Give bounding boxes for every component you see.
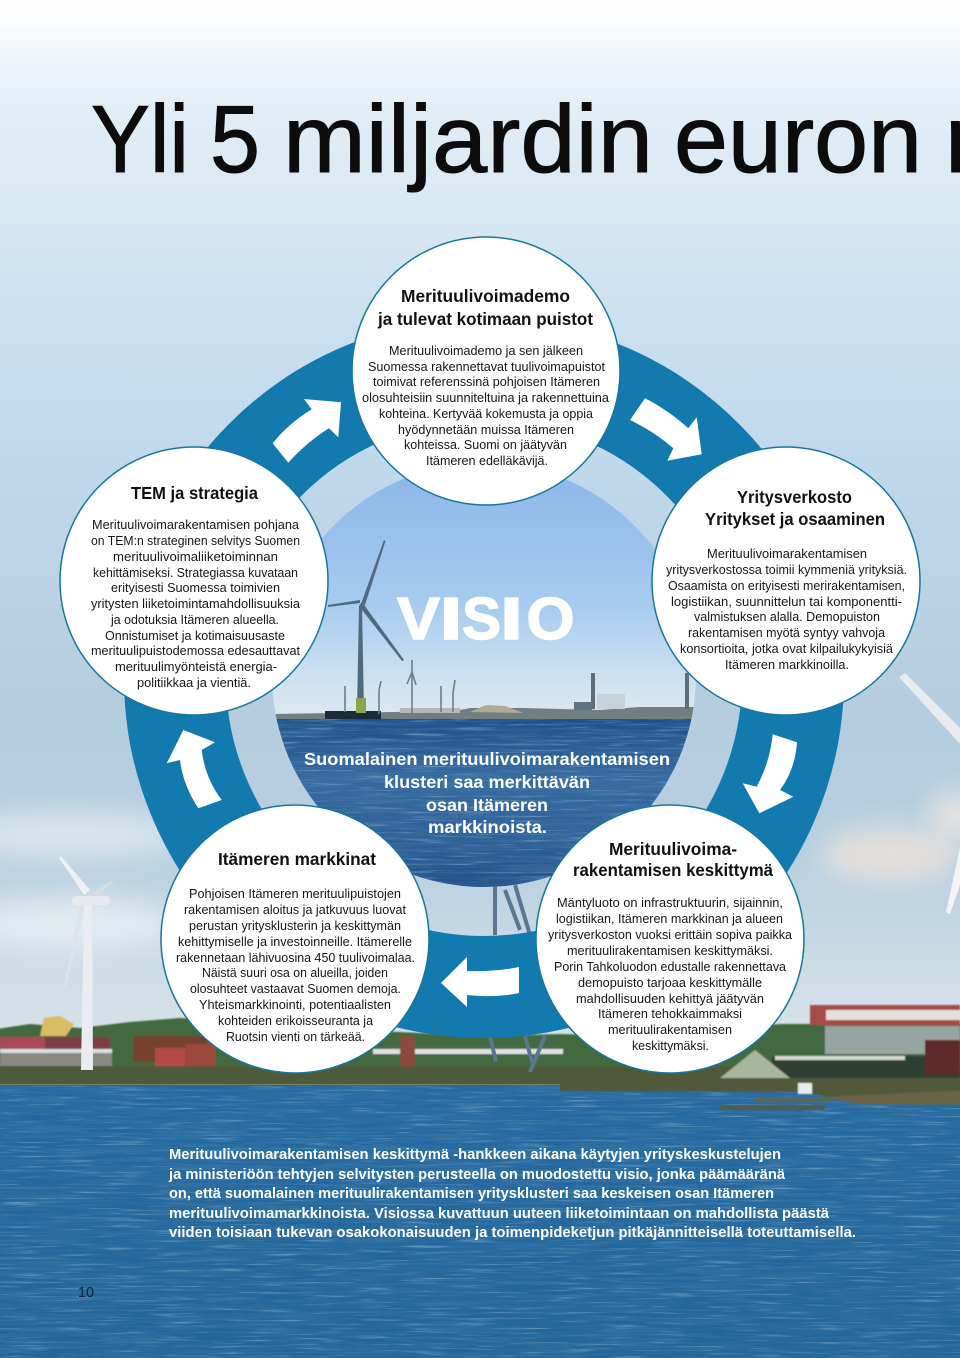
- text block: Yritysverkosto body: logistiikan, suunnittelun tai komponentti-: [671, 594, 902, 609]
- heading: Itämeren markkinat: Itämeren markkinat: [218, 849, 376, 869]
- heading: VISIO: I: [440, 586, 462, 652]
- heading: Merituulivoimademo: [377, 286, 593, 329]
- heading: Merituulivoimarakentamisen keskittymä: [573, 839, 773, 880]
- text block: vision statement: [304, 749, 670, 837]
- text block: footer paragraph: [168, 1147, 856, 1241]
- text block: TEM ja strategia body: erityisesti Suomessa toimivien: [111, 580, 280, 595]
- heading: VISIO: [397, 586, 574, 652]
- text block: Yritysverkosto body: konsortioita, jotka ovat kilpailukykyisiä: [680, 641, 894, 656]
- title: Yli: [91, 86, 189, 193]
- heading: Merituulivoimarakentamisen keskittymä: rakentamisen keskittymä: [573, 860, 773, 880]
- text block: Itämeren markkinat body: kohteiden erikoisseuranta ja: [218, 1013, 374, 1028]
- text block: Merituulivoimademo body: hyödynnetään muissa Itämeren: [398, 422, 574, 437]
- icon: background wind turbine blades right: [899, 673, 960, 914]
- text block: footer paragraph: merituulivoimamarkkinoista. Visiossa kuvattuun uuteen liiketoimintaan on mahdollista päästä: [169, 1206, 830, 1222]
- text block: keskittymä body: logistiikan, Itämeren markkinan ja alueen: [556, 911, 783, 926]
- background: harbour crane: [490, 885, 545, 1072]
- text block: footer paragraph: ja ministeriöön tehtyjen selvitysten perusteella on muodostettu visio, jonka päämääränä: [168, 1167, 786, 1183]
- text block: TEM ja strategia body: Merituulivoimarakentamisen pohjana: [92, 517, 300, 532]
- panel: vision photo circle: [270, 460, 700, 890]
- text block: Itämeren markkinat body: [176, 886, 415, 1044]
- text block: TEM ja strategia body: merituulivoimaliiketoiminnan: [113, 549, 278, 564]
- text block: Itämeren markkinat body: olosuhteet vastaavat Suomen demoja.: [190, 981, 401, 996]
- text block: Merituulivoimademo body: toimivat referenssinä pohjoisen Itämeren: [373, 374, 600, 389]
- heading: Yritysverkosto: [705, 487, 885, 529]
- text block: TEM ja strategia body: politiikkaa ja vientiä.: [137, 675, 251, 690]
- text block: TEM ja strategia body: on TEM:n strateginen selvitys Suomen: [91, 533, 300, 548]
- panel: Itämeren markkinat: [161, 805, 429, 1073]
- text block: Merituulivoimademo body: kohteissa. Suomi on jäätyvän: [404, 437, 567, 452]
- text block: TEM ja strategia body: Onnistumiset ja kotimaisuusaste: [105, 628, 285, 643]
- text block: keskittymä body: mahdollisuuden kehittyä jäätyvän: [576, 991, 764, 1006]
- text block: Merituulivoimademo body: olosuhteisiin suunniteltuina ja rakennettuina: [362, 390, 610, 405]
- heading: TEM ja strategia: TEM ja strategia: [131, 483, 258, 503]
- photo: distant turbines: [345, 660, 455, 714]
- heading: VISIO: I: [500, 586, 523, 652]
- text block: Yritysverkosto body: Osaamista on erityisesti merirakentamisen,: [668, 578, 905, 593]
- title: [91, 86, 960, 193]
- page number: 10: [78, 1284, 94, 1301]
- heading: Merituulivoimarakentamisen keskittymä: Merituulivoima-: [609, 839, 737, 859]
- text block: vision statement: klusteri saa merkittävän: [384, 772, 590, 792]
- heading: VISIO: V: [397, 586, 440, 652]
- text block: TEM ja strategia body: [91, 517, 301, 690]
- text block: keskittymä body: Itämeren tehokkaimmaksi: [598, 1006, 742, 1021]
- text block: TEM ja strategia body: kehittämiseksi. Strategiassa kuvataan: [93, 565, 298, 580]
- panel: TEM ja strategia: [60, 447, 328, 715]
- text block: keskittymä body: merituulirakentamisen: [608, 1022, 732, 1037]
- text block: vision statement: Suomalainen merituulivoimarakentamisen: [304, 749, 670, 769]
- heading: Yritysverkosto: Yritykset ja osaaminen: [705, 509, 885, 529]
- text block: Itämeren markkinat body: Pohjoisen Itämeren merituulipuistojen: [189, 886, 401, 901]
- text block: keskittymä body: Mäntyluoto on infrastruktuurin, sijainnin,: [557, 895, 783, 910]
- text block: Yritysverkosto body: valmistuksen alalla. Demopuiston: [694, 609, 880, 624]
- text block: Merituulivoimademo body: Itämeren edelläkävijä.: [426, 453, 548, 468]
- icon: background wind turbine left: [59, 856, 113, 1070]
- heading: Yritysverkosto: Yritysverkosto: [737, 487, 852, 507]
- panel: blue ring: [175, 369, 793, 987]
- text block: Itämeren markkinat body: rakennetaan lähivuosina 450 tuulivoimalaa.: [176, 950, 415, 965]
- heading: Merituulivoimademo: Merituulivoimademo: [401, 286, 570, 306]
- text block: TEM ja strategia body: merituulipuistodemossa edesauttavat: [91, 643, 300, 658]
- text block: Yritysverkosto body: rakentamisen myötä syntyy vahvoja: [688, 625, 886, 640]
- panel: Merituulivoimarakentamisen keskittymä: [536, 805, 804, 1073]
- text block: Merituulivoimademo body: Merituulivoimademo ja sen jälkeen: [389, 343, 583, 358]
- text block: TEM ja strategia body: ja odotuksia Itämeren alueella.: [110, 612, 279, 627]
- text block: TEM ja strategia body: merituulimyönteistä energia-: [115, 659, 277, 674]
- icon: arrow bottom: [441, 957, 519, 1007]
- text block: Yritysverkosto body: Itämeren markkinoilla.: [725, 657, 849, 672]
- text block: Itämeren markkinat body: rakentamisen aloitus ja jatkuvuus luovat: [184, 902, 406, 917]
- heading: VISIO: O: [526, 586, 574, 652]
- text block: Itämeren markkinat body: Näistä suuri osa on alueilla, joiden: [202, 965, 388, 980]
- icon: arrow right: [743, 734, 797, 813]
- icon: arrow left: [167, 730, 222, 808]
- text block: keskittymä body: demopuisto tarjoaa keskittymälle: [578, 975, 762, 990]
- text block: keskittymä body: keskittymäksi.: [632, 1038, 709, 1053]
- text block: Itämeren markkinat body: kehittymiselle ja investoinneille. Itämerelle: [178, 934, 412, 949]
- text block: footer paragraph: Merituulivoimarakentamisen keskittymä -hankkeen aikana käytyjen yrityskeskustelujen: [169, 1147, 781, 1163]
- icon: arrow top left: [273, 399, 341, 463]
- background: shoreline with buildings: [0, 1005, 960, 1110]
- text block: vision statement: osan Itämeren: [426, 795, 548, 815]
- text block: Itämeren markkinat body: Ruotsin vienti on tärkeää.: [226, 1029, 365, 1044]
- photo: horizon industry silhouette: [272, 673, 696, 719]
- text block: footer paragraph: on, että suomalainen merituulirakentamisen yritysklusteri saa keskeisen osan Itämeren: [169, 1186, 774, 1202]
- text block: Yritysverkosto body: [666, 546, 907, 672]
- heading: Merituulivoimademo: ja tulevat kotimaan puistot: [377, 309, 593, 329]
- text block: vision statement: markkinoista.: [428, 817, 547, 837]
- text block: keskittymä body: yritysverkoston vuoksi erittäin sopiva paikka: [548, 927, 793, 942]
- panel: Yritysverkosto: [652, 447, 920, 715]
- text block: Itämeren markkinat body: perustan yritysklusterin ja keskittymän: [189, 918, 401, 933]
- text block: footer paragraph: viiden toisiaan tukevan osakokonaisuuden ja toimenpideketjun pitkäjännitteisellä toteuttamisella.: [169, 1225, 856, 1241]
- text block: Yritysverkosto body: yritysverkostossa toimii kymmeniä yrityksiä.: [666, 562, 907, 577]
- title: euron: [674, 86, 922, 193]
- title: 5: [210, 86, 260, 193]
- heading: VISIO: S: [462, 586, 501, 652]
- icon: arrow top right: [630, 398, 702, 461]
- text block: keskittymä body: merituulirakentamisen keskittymäksi.: [567, 943, 773, 958]
- text block: keskittymä body: Porin Tahkoluodon edustalle rakennettava: [554, 959, 787, 974]
- photo: large turbine: [328, 540, 404, 713]
- title: miljardin: [283, 86, 653, 193]
- panel: Merituulivoimademo: [352, 237, 620, 505]
- text block: keskittymä body: [548, 895, 793, 1053]
- text block: Merituulivoimademo body: Suomessa rakennettavat tuulivoimapuistot: [368, 359, 605, 374]
- text block: Yritysverkosto body: Merituulivoimarakentamisen: [707, 546, 867, 561]
- text block: Merituulivoimademo body: kohteina. Kertyvää kokemusta ja oppia: [379, 406, 594, 421]
- text block: TEM ja strategia body: yritysten liiketoimintamahdollisuuksia: [91, 596, 301, 611]
- text block: Itämeren markkinat body: Yhteismarkkinointi, potentiaalisten: [199, 997, 391, 1012]
- text block: Merituulivoimademo body: [362, 343, 610, 468]
